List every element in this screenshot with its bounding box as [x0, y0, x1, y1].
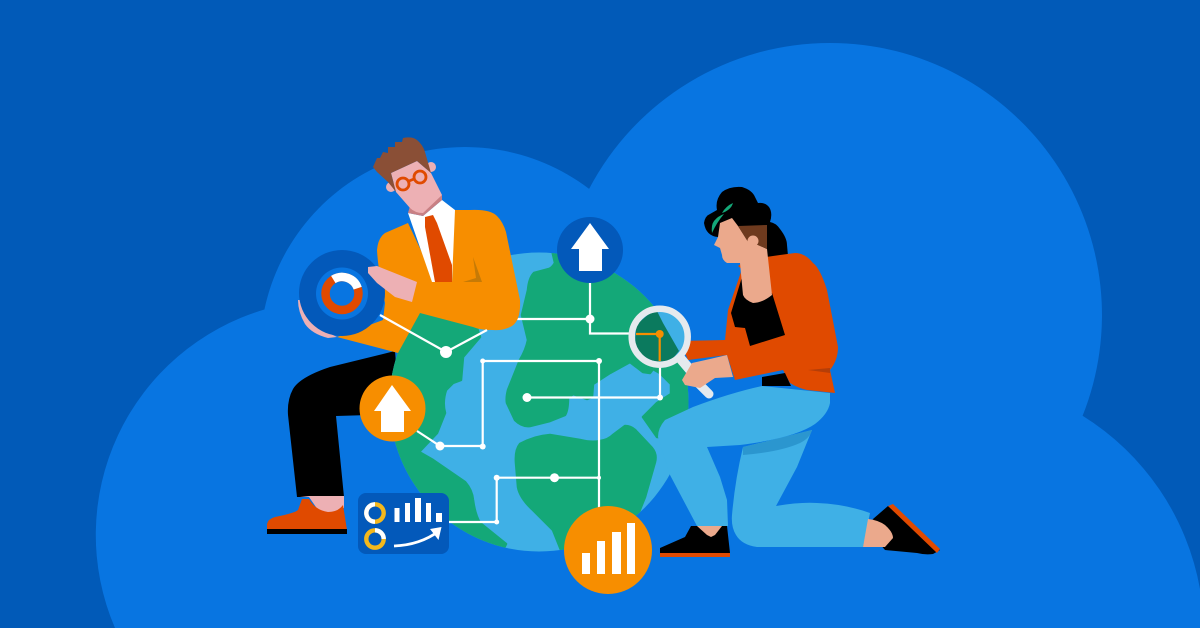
woman: hand holding magnifier — [682, 355, 733, 388]
woman: back foot — [863, 504, 940, 554]
woman: hair — [704, 187, 788, 262]
orange upload badge — [360, 376, 426, 442]
continent: south — [516, 426, 656, 555]
man: trousers — [288, 351, 400, 497]
magnifier lens land — [635, 311, 679, 362]
magnifier — [632, 309, 709, 394]
line from disk to node — [380, 315, 487, 358]
man: head — [373, 137, 442, 216]
globe — [392, 252, 688, 552]
network connection lines behind man — [417, 282, 660, 522]
woman: hair sideburn — [738, 225, 767, 249]
magnifier handle — [680, 358, 697, 378]
man: hair — [373, 137, 431, 192]
man: glasses — [397, 171, 426, 190]
man: hand on disk — [368, 266, 417, 302]
man: shirt and tie — [408, 200, 455, 282]
man: jacket — [337, 210, 520, 353]
man: jacket pocket fold — [463, 257, 482, 282]
woman: front thigh — [658, 386, 830, 526]
woman: face and neck — [714, 218, 772, 303]
continent: west — [392, 313, 508, 548]
network nodes — [436, 314, 663, 524]
woman: green hair accent — [712, 203, 733, 233]
man: shoe — [267, 496, 347, 534]
woman: trouser rear leg — [732, 430, 870, 547]
blue upload badge — [557, 217, 623, 283]
continent: north — [507, 245, 700, 440]
woman: front foot — [660, 526, 730, 557]
woman: ear — [748, 236, 758, 246]
woman: jacket — [680, 253, 838, 393]
dashboard card — [358, 493, 449, 554]
man: right hand lower — [298, 300, 337, 338]
donut disk — [299, 250, 385, 336]
woman: black top — [731, 277, 791, 386]
woman: jacket fold — [808, 368, 830, 373]
orange bar chart badge — [564, 506, 652, 594]
